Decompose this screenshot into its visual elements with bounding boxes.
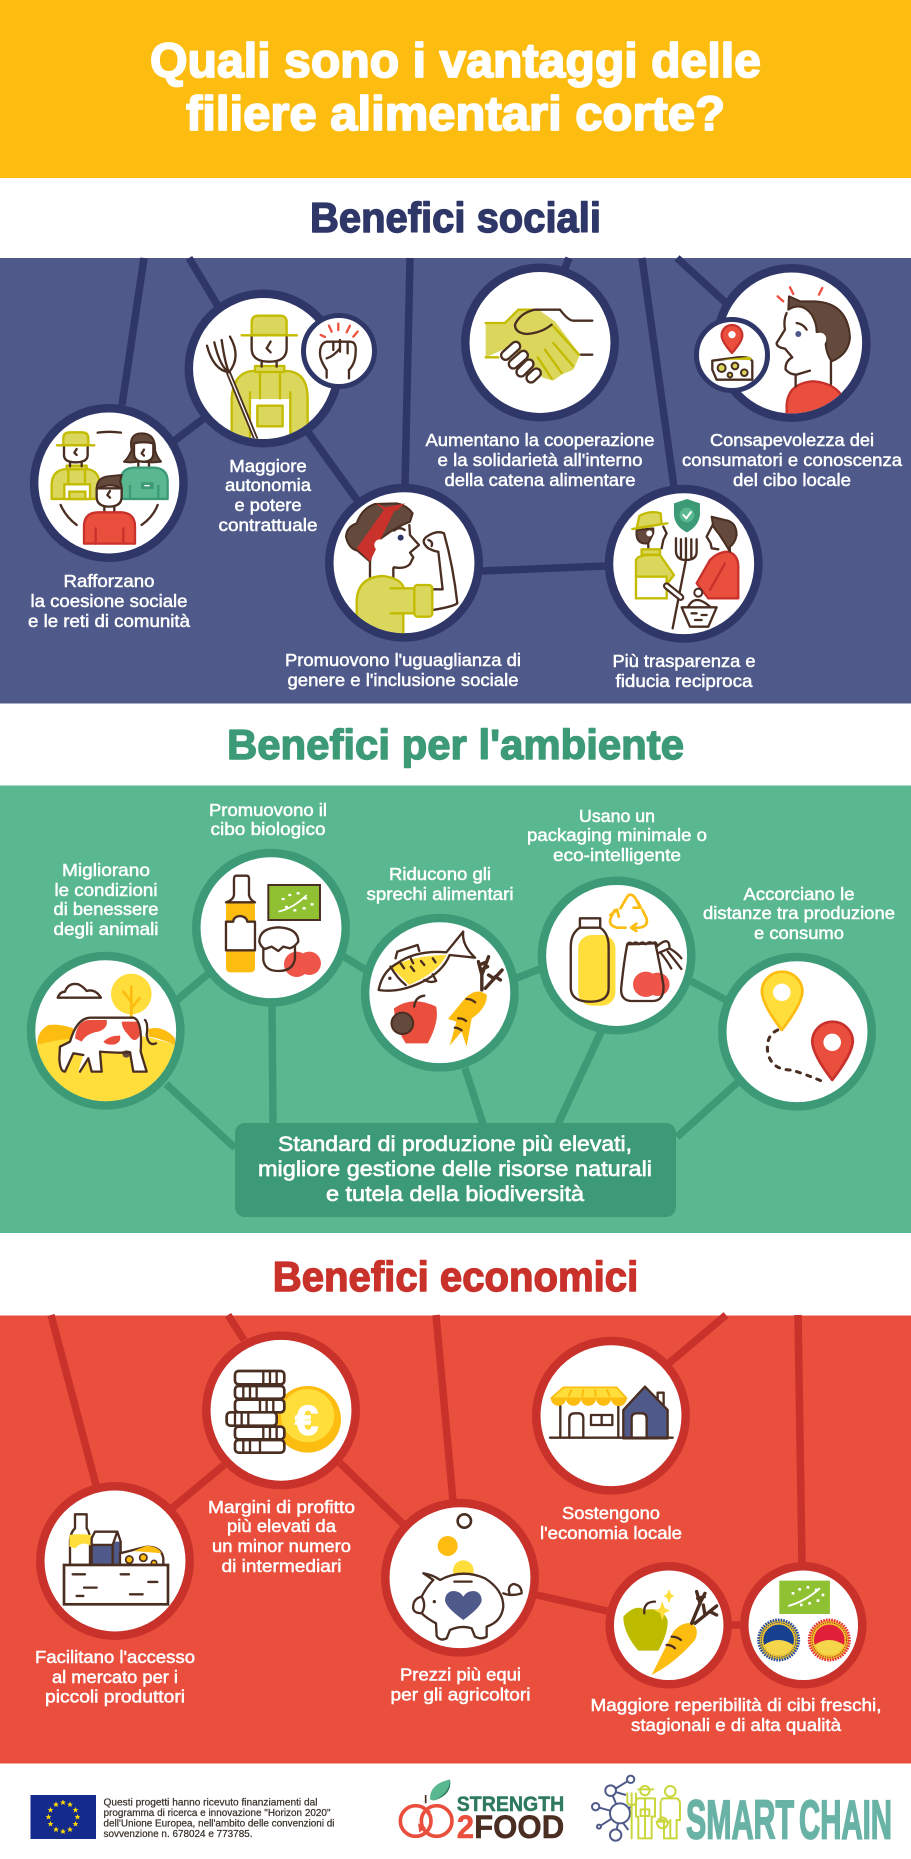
title: filiere alimentari corte? [186,88,725,141]
label: economia locale [540,1503,682,1543]
icon: community group [34,408,184,558]
callout: standard di produzione: Standard di produzione più elevati, [278,1133,632,1156]
heading: Benefici economici: Benefici economici [273,1253,638,1300]
connector network [122,258,726,571]
label: packaging: Usano un [579,806,655,826]
logo: Strength2Food: 2FOOD [457,1809,564,1845]
title: Quali sono i vantaggi delle [150,35,761,88]
label: cooperazione: e la solidarietà all'interno [438,450,642,470]
label: accesso al mercato [35,1647,195,1706]
icon: consumer face [717,268,866,418]
label: cooperazione [426,430,654,490]
label: reperibilità [590,1695,882,1735]
eu organic leaf [779,1581,830,1614]
callout: standard di produzione: e tutela della biodiversità [326,1183,584,1206]
funding note: sovvenzione n. 678024 e 773785. [104,1828,252,1840]
label: trasparenza: fiducia reciproca [616,671,753,691]
label: margini: un minor numero [212,1536,351,1556]
icon: local cheese badge [696,320,768,390]
label: accesso al mercato: piccoli produttori [45,1686,185,1706]
label: economia locale: Sostengono [562,1503,660,1523]
label: consapevolezza: del cibo locale [733,470,851,490]
label: autonomia: contrattuale [218,515,318,535]
logo: SmartChain [592,1776,892,1850]
label: prezzi: Prezzi più equi [400,1664,521,1684]
label: autonomia: Maggiore [229,456,307,476]
heading: Benefici per l'ambiente: Benefici per l'ambiente [227,721,684,768]
icon: minimal packaging [542,881,691,1030]
icon: farmer with pitchfork [189,294,338,445]
panel: benefici economici [0,1315,911,1764]
label: biologico: cibo biologico [210,819,326,839]
icon: stack of coins [206,1336,356,1485]
logo: Strength2Food [400,1779,564,1845]
pgi seal [759,1620,799,1660]
icon: grazing cow [31,956,180,1105]
icon: organic bottle and jar [196,853,346,1002]
label: economia locale: l'economia locale [540,1523,682,1543]
label: distanze [703,884,895,943]
funding note: dell'Unione Europea, nell'ambito delle convenzioni di [104,1818,334,1830]
label: uguaglianza: genere e l'inclusione sociale [288,670,518,690]
label: sprechi: sprechi alimentari [366,884,514,904]
icon: quality labels [744,1566,862,1684]
footer [30,1776,892,1850]
icon: handshake [465,268,615,417]
label: packaging [527,806,707,865]
logo: Strength2Food: STRENGTH [457,1792,564,1816]
panel: benefici per l'ambiente [0,786,911,1233]
pdo seal [809,1620,849,1660]
callout: standard di produzione: migliore gestione delle risorse naturali [258,1158,652,1181]
icon: stack of coins: € [295,1396,318,1443]
label: consapevolezza [682,430,902,490]
icon: two map pins [722,957,872,1106]
label: prezzi: per gli agricoltori [390,1684,530,1704]
icon: empowered woman [329,488,479,637]
label: packaging: packaging minimale o [527,825,707,845]
label: reperibilità: stagionali e di alta qualità [631,1715,841,1735]
label: reperibilità: Maggiore reperibilità di cibi freschi, [590,1695,882,1715]
label: animali [54,860,158,939]
icon: fish apple carrot [365,918,514,1067]
icon: raised fist badge [304,316,374,386]
icon: farmer and consumer trust [609,489,758,638]
label: biologico [209,800,327,839]
label: uguaglianza [285,650,521,690]
callout: standard di produzione [235,1123,676,1217]
label: trasparenza: Più trasparenza e [612,651,756,671]
label: sprechi [366,864,514,904]
icon: piggy bank [385,1503,535,1652]
label: packaging: eco-intelligente [553,845,681,865]
funding note [104,1796,334,1840]
connector network [51,1315,802,1625]
label: animali: degli animali [54,919,158,939]
label: consapevolezza: consumatori e conoscenza [682,450,902,470]
label: trasparenza [612,651,756,691]
label: distanze: e consumo [754,923,844,943]
label: consapevolezza: Consapevolezza dei [710,430,874,450]
icon: shop and house [536,1341,686,1490]
label: margini: Margini di profitto [208,1497,355,1517]
panel: benefici sociali [0,258,911,704]
label: coesione: e le reti di comunità [28,611,190,631]
icon: market crate [40,1486,190,1636]
title [150,35,761,141]
label: accesso al mercato: al mercato per i [52,1667,178,1687]
heading: Benefici sociali: Benefici sociali [310,194,601,241]
label: distanze: distanze tra produzione [703,903,895,923]
label: uguaglianza: Promuovono l'uguaglianza di [285,650,521,670]
connector network [166,956,738,1148]
label: biologico: Promuovono il [209,800,327,820]
label: margini: più elevati da [227,1516,336,1536]
label: coesione [28,571,190,631]
label: animali: le condizioni [54,880,158,900]
label: cooperazione: della catena alimentare [444,470,636,490]
label: margini [208,1497,355,1576]
label: distanze: Accorciano le [744,884,854,904]
label: autonomia [218,456,318,535]
icon: EU flag [30,1795,96,1839]
label: sprechi: Riducono gli [389,864,491,884]
funding note: Questi progetti hanno ricevuto finanziamenti dal [104,1796,318,1808]
label: coesione: Rafforzano [64,571,154,591]
label: cooperazione: Aumentano la cooperazione [426,430,654,450]
icon: fresh pepper and carrot [610,1566,728,1684]
funding note: programma di ricerca e innovazione "Horizon 2020" [104,1807,331,1819]
label: accesso al mercato: Facilitano l'accesso [35,1647,195,1667]
label: margini: di intermediari [222,1556,342,1576]
logo: SmartChain: SMART [686,1788,794,1850]
header banner [0,0,911,178]
label: prezzi [390,1664,530,1704]
label: autonomia: e potere [234,495,302,515]
label: coesione: la coesione sociale [30,591,188,611]
label: animali: Migliorano [62,860,150,880]
label: autonomia: autonomia [225,475,311,495]
label: animali: di benessere [54,899,158,919]
